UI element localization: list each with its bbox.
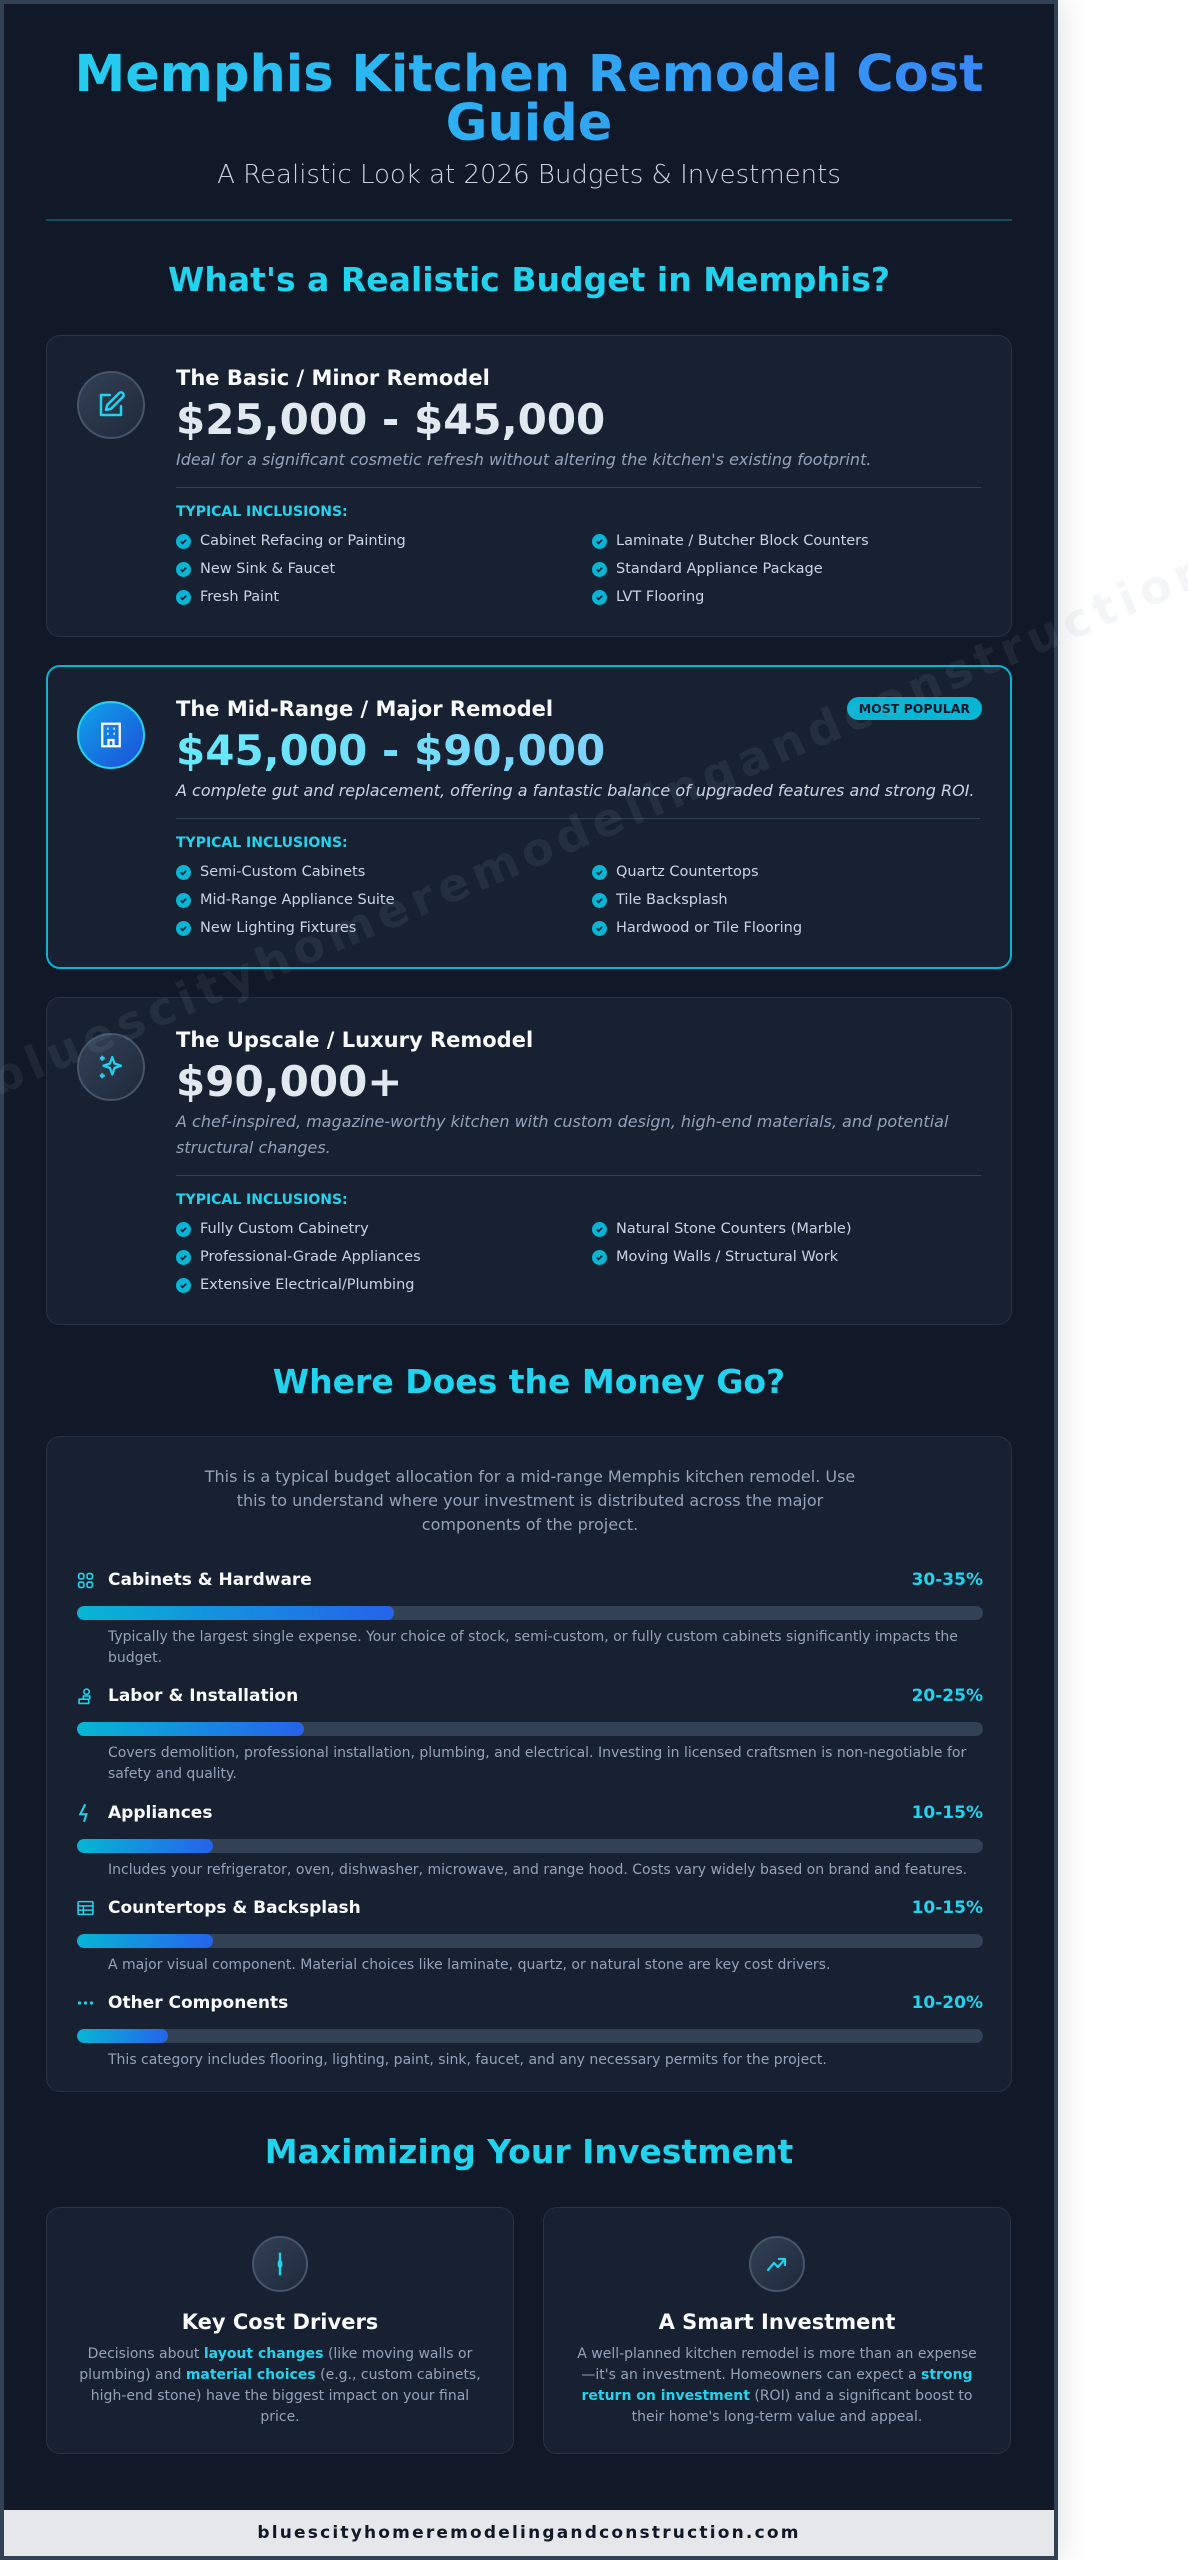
- inclusions list: Fully Custom Cabinetry: [200, 1221, 369, 1237]
- icon: edit: [77, 371, 145, 439]
- panel: upscale remodel: [46, 997, 1012, 1325]
- item: other: [77, 1993, 983, 2068]
- item: appliances: Includes your refrigerator, oven, dishwasher, microwave, and range hood. Costs vary widely based on brand and features.: [108, 1862, 967, 1878]
- item: cabinets: [77, 1570, 983, 1666]
- inclusions list: Moving Walls / Structural Work: [616, 1249, 838, 1265]
- subtitle: A Realistic Look at 2026 Budgets & Investments: [217, 160, 841, 190]
- inclusions list: Semi-Custom Cabinets: [200, 864, 365, 880]
- item: labor: Covers demolition, professional installation, plumbing, and electrical. Investing in licensed craftsmen is non-negotiable for safety and quality.: [108, 1745, 966, 1782]
- badge: [847, 697, 982, 720]
- heading: maximizing: Maximizing Your Investment: [265, 2132, 793, 2171]
- intro text: This is a typical budget allocation for a mid-range Memphis kitchen remodel. Use this to understand where your investment is distributed across the major components of the project.: [205, 1467, 855, 1534]
- inclusions list: Standard Appliance Package: [616, 561, 823, 577]
- item: labor: 20-25%: [912, 1686, 983, 1706]
- item: appliances: Appliances: [108, 1803, 212, 1823]
- title: [0, 50, 1058, 148]
- title: Guide: [446, 94, 612, 153]
- heading: realistic budget: What's a Realistic Budget in Memphis?: [168, 260, 890, 299]
- description: Ideal for a significant cosmetic refresh without altering the kitchen's existing footprint.: [176, 450, 871, 469]
- inclusions list: Laminate / Butcher Block Counters: [616, 533, 869, 549]
- item: appliances: [77, 1803, 983, 1878]
- icon: drivers: [252, 2236, 308, 2292]
- inclusions list: Natural Stone Counters (Marble): [616, 1221, 852, 1237]
- inclusions list: New Sink & Faucet: [200, 561, 335, 577]
- panel: smart investment: [543, 2207, 1011, 2454]
- heading: money: Where Does the Money Go?: [273, 1362, 785, 1401]
- inclusions list: Quartz Countertops: [616, 864, 759, 880]
- title: Memphis Kitchen Remodel Cost: [74, 45, 984, 104]
- inclusions list: Tile Backsplash: [616, 892, 728, 908]
- item: countertops: Countertops & Backsplash: [108, 1898, 361, 1918]
- panel: key cost drivers: [46, 2207, 514, 2454]
- footer: [4, 2510, 1054, 2556]
- inclusions list: Extensive Electrical/Plumbing: [200, 1277, 414, 1293]
- item: cabinets: Cabinets & Hardware: [108, 1570, 312, 1590]
- icon: building: [77, 701, 145, 769]
- title: A Smart Investment: [659, 2310, 895, 2334]
- item: other: 10-20%: [912, 1993, 983, 2013]
- item: countertops: [77, 1898, 983, 1973]
- title: Key Cost Drivers: [182, 2310, 378, 2334]
- description: A complete gut and replacement, offering a fantastic balance of upgraded features and strong ROI.: [176, 781, 975, 800]
- item: other: Other Components: [108, 1993, 288, 2013]
- inclusions list: [176, 533, 869, 605]
- card title: The Basic / Minor Remodel: [176, 366, 490, 390]
- inclusions list: LVT Flooring: [616, 589, 704, 605]
- item: labor: [77, 1686, 983, 1782]
- inclusions list: Mid-Range Appliance Suite: [200, 892, 395, 908]
- text: A well-planned kitchen remodel is more than an expense—it's an investment. Homeowners can expect a strong return on investment (ROI) and a significant boost to their home's long-term value and appeal.: [577, 2346, 977, 2425]
- inclusions heading: TYPICAL INCLUSIONS:: [176, 1192, 348, 1208]
- inclusions list: Professional-Grade Appliances: [200, 1249, 421, 1265]
- description: A chef-inspired, magazine-worthy kitchen with custom design, high-end materials, and potential structural changes.: [176, 1112, 948, 1157]
- inclusions list: New Lighting Fixtures: [200, 920, 356, 936]
- inclusions list: Fresh Paint: [200, 589, 279, 605]
- price: $45,000 - $90,000: [176, 726, 605, 775]
- item: countertops: 10-15%: [912, 1898, 983, 1918]
- item: countertops: A major visual component. Material choices like laminate, quartz, or natural stone are key cost drivers.: [108, 1957, 830, 1973]
- item: other: This category includes flooring, lighting, paint, sink, faucet, and any necessary permits for the project.: [108, 2052, 827, 2068]
- inclusions list: [176, 1221, 852, 1293]
- icon: sparkles: [77, 1033, 145, 1101]
- item: cabinets: 30-35%: [912, 1570, 983, 1590]
- text: Decisions about layout changes (like moving walls or plumbing) and material choices (e.g., custom cabinets, high-end stone) have the biggest impact on your final price.: [79, 2346, 481, 2425]
- inclusions list: Hardwood or Tile Flooring: [616, 920, 802, 936]
- panel: budget allocation: [46, 1436, 1012, 2092]
- panel: basic remodel: [46, 335, 1012, 637]
- price: $90,000+: [176, 1057, 402, 1106]
- item: labor: Labor & Installation: [108, 1686, 298, 1706]
- inclusions heading: TYPICAL INCLUSIONS:: [176, 504, 348, 520]
- footer: bluescityhomeremodelingandconstruction.com: [257, 2523, 801, 2543]
- panel: mid-range remodel: [46, 665, 1012, 969]
- card title: The Mid-Range / Major Remodel: [176, 697, 553, 721]
- item: appliances: 10-15%: [912, 1803, 983, 1823]
- item: cabinets: Typically the largest single expense. Your choice of stock, semi-custom, or fully custom cabinets significantly impacts the budget.: [108, 1629, 958, 1666]
- inclusions heading: TYPICAL INCLUSIONS:: [176, 835, 348, 851]
- inclusions list: Cabinet Refacing or Painting: [200, 533, 406, 549]
- badge: MOST POPULAR: [859, 701, 970, 716]
- price: $25,000 - $45,000: [176, 395, 605, 444]
- card title: The Upscale / Luxury Remodel: [176, 1028, 533, 1052]
- inclusions list: [176, 864, 802, 936]
- icon: trending up: [749, 2236, 805, 2292]
